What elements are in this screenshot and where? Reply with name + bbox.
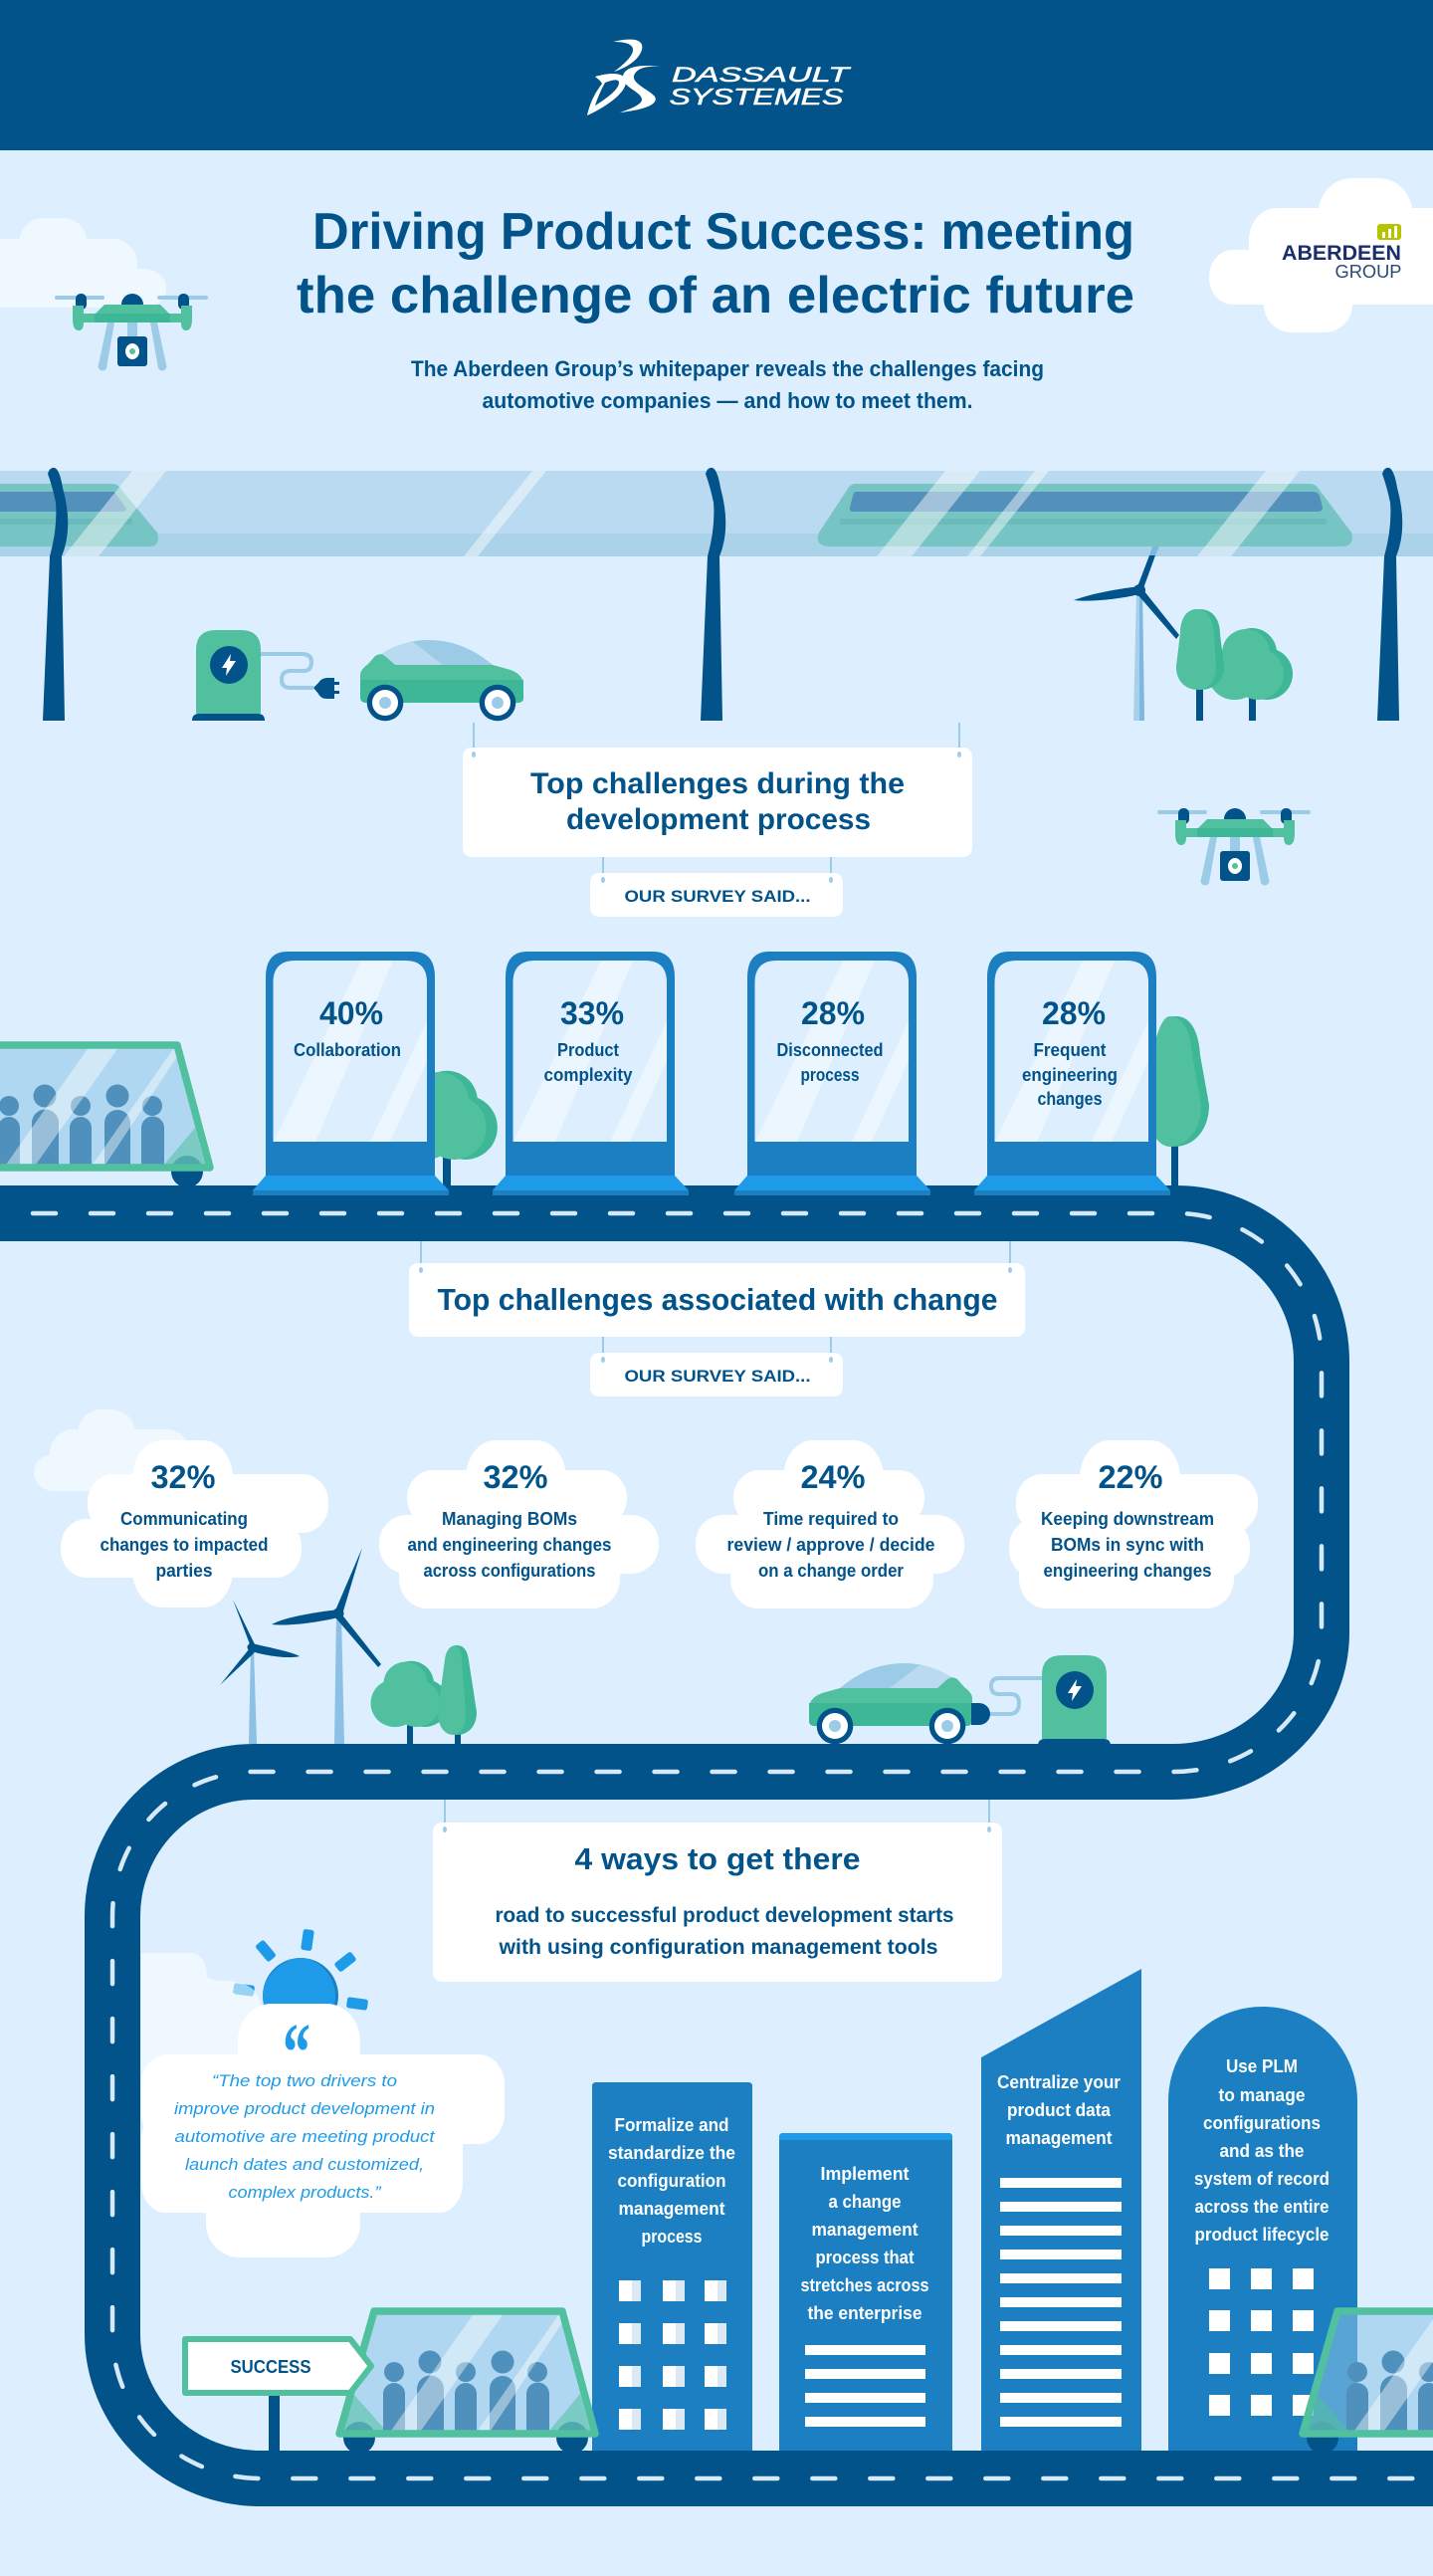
trees middle (371, 1645, 477, 1745)
cloud stat 3: time required: review / approve / decide (726, 1535, 935, 1555)
tree beside kiosk 4 (1144, 1016, 1209, 1186)
cloud stat 2: managing BOMs: across configurations (424, 1561, 595, 1581)
cloud stat 2: managing BOMs: Managing BOMs (442, 1509, 577, 1529)
kiosk 3: disconnected process: process (800, 1065, 860, 1085)
Aberdeen Group logo on cloud: ABERDEEN (1282, 242, 1401, 265)
tree beside kiosk 1 (392, 1071, 498, 1192)
panel: 4 ways to get there: 4 ways to get there (575, 1841, 860, 1876)
success signpost (185, 2339, 371, 2452)
wind turbines middle (220, 1548, 381, 1744)
building 1: standardize the (608, 2143, 735, 2163)
kiosk 1: collaboration (253, 952, 449, 1195)
kiosk 2: product complexity (493, 952, 689, 1195)
faint cloud behind stat 1 (34, 1409, 190, 1491)
building 2 (779, 2133, 952, 2451)
title: Driving Product Success: meeting (312, 203, 1134, 261)
building 1: management (619, 2199, 724, 2219)
cloud stat 1: communicating changes: changes to impacted (100, 1535, 269, 1555)
panel: top challenges during development (463, 723, 972, 857)
cloud stat 1: communicating changes: Communicating (120, 1509, 248, 1529)
panel: top challenges associated with change (409, 1241, 1025, 1337)
quote cloud: launch dates and customized, (185, 2155, 424, 2174)
trees top (1176, 609, 1293, 721)
cloud stat 1: communicating changes: parties (155, 1561, 213, 1581)
header band with Dassault Systemes logo (0, 0, 1433, 150)
bus centre (339, 2311, 595, 2454)
subtitle: The Aberdeen Group’s whitepaper reveals the challenges facing (411, 356, 1044, 381)
cloud stat 4: keeping downstream: engineering changes (1043, 1561, 1212, 1581)
building 4: and as the (1220, 2141, 1304, 2161)
kiosk 1: collaboration: Collaboration (294, 1040, 401, 1060)
quote cloud: “ (283, 2007, 310, 2099)
guideway glass reflections (64, 471, 1300, 556)
kiosk 3: disconnected process (734, 952, 930, 1195)
quote cloud (141, 2004, 505, 2257)
subtitle (411, 356, 1044, 413)
faint cloud top left (0, 218, 166, 308)
faint cloud over sun (141, 1953, 261, 2105)
building 2: Implement (820, 2164, 910, 2184)
kiosk 4: frequent engineering changes (974, 952, 1170, 1195)
Aberdeen Group logo on cloud: GROUP (1335, 262, 1401, 282)
road (0, 1213, 1433, 2478)
charger top (192, 630, 265, 721)
kiosk 4: frequent engineering changes: 28% (1042, 995, 1106, 1031)
success signpost: SUCCESS (231, 2357, 310, 2377)
panel: top challenges during development: Top challenges during the (530, 767, 905, 800)
kiosk 2: product complexity: Product (557, 1040, 619, 1060)
train right (818, 484, 1352, 546)
sun with rays (233, 1929, 368, 2034)
pylon 1 (43, 468, 68, 721)
panel: top challenges during development: development process (566, 803, 871, 836)
panel: 4 ways to get there (433, 1800, 1002, 1982)
drone left (57, 294, 206, 370)
panel: our survey said 2: OUR SURVEY SAID... (625, 1367, 810, 1386)
building 4: across the entire (1194, 2197, 1330, 2217)
panel: our survey said 1 (590, 857, 843, 917)
cloud stat 2: managing BOMs: and engineering changes (408, 1535, 611, 1555)
header band with Dassault Systemes logo: DASSAULT (672, 64, 853, 87)
kiosk 3: disconnected process: Disconnected (776, 1040, 884, 1060)
kiosk 2: product complexity: complexity (543, 1065, 633, 1085)
building 3 (981, 1969, 1141, 2451)
train left (0, 484, 158, 546)
kiosk 3: disconnected process: 28% (801, 995, 865, 1031)
drone right (1159, 808, 1309, 885)
cable top (261, 654, 313, 688)
cloud stat 4: keeping downstream: 22% (1099, 1459, 1162, 1495)
plug middle (971, 1703, 990, 1725)
bus right (1303, 2311, 1433, 2454)
kiosk 2: product complexity: 33% (560, 995, 624, 1031)
building 4: system of record (1194, 2169, 1330, 2189)
cloud stat 4: keeping downstream: BOMs in sync with (1051, 1535, 1204, 1555)
car top (360, 640, 523, 721)
building 3: product data (1007, 2100, 1112, 2120)
wind turbine top (1074, 546, 1179, 721)
building 2: the enterprise (808, 2303, 921, 2323)
building 1: Formalize and (615, 2115, 728, 2135)
building 1: configuration (617, 2171, 726, 2191)
cloud stat 2: managing BOMs (379, 1440, 659, 1609)
building 4: product lifecycle (1194, 2225, 1330, 2245)
cloud stat 3: time required (696, 1440, 964, 1609)
building 4: to manage (1218, 2085, 1306, 2105)
header band with Dassault Systemes logo: SYSTEMES (669, 84, 844, 109)
panel: 4 ways to get there: with using configuration management tools (498, 1936, 937, 1959)
cloud stat 1: communicating changes: 32% (151, 1459, 215, 1495)
cable middle (987, 1678, 1042, 1714)
building 2: stretches across (800, 2275, 929, 2295)
building 4 (1168, 2007, 1357, 2451)
cloud stat 3: time required: on a change order (758, 1561, 904, 1581)
quote cloud: improve product development in (174, 2099, 435, 2118)
charger middle (1038, 1655, 1111, 1746)
Aberdeen Group logo on cloud (1209, 178, 1433, 332)
panel: 4 ways to get there: road to successful product development starts (496, 1904, 953, 1927)
title: the challenge of an electric future (297, 267, 1134, 324)
cloud stat 2: managing BOMs: 32% (484, 1459, 547, 1495)
cloud stat 4: keeping downstream: Keeping downstream (1041, 1509, 1214, 1529)
building 1: process (641, 2227, 703, 2247)
cloud stat 1: communicating changes (61, 1440, 328, 1608)
panel: top challenges associated with change: Top challenges associated with change (438, 1282, 997, 1317)
cloud stat 3: time required: Time required to (763, 1509, 899, 1529)
building 4: Use PLM (1226, 2056, 1298, 2076)
kiosk 4: frequent engineering changes: changes (1037, 1089, 1103, 1109)
building 2: management (812, 2220, 918, 2240)
building 2: process that (816, 2248, 914, 2267)
quote cloud: “The top two drivers to (212, 2071, 397, 2090)
building 3: Centralize your (997, 2072, 1121, 2092)
pylon 2 (701, 468, 725, 721)
kiosk 4: frequent engineering changes: engineering (1022, 1065, 1118, 1085)
panel: our survey said 2 (590, 1337, 843, 1396)
quote cloud: complex products.” (229, 2183, 382, 2202)
quote cloud: automotive are meeting product (175, 2127, 436, 2146)
cloud stat 3: time required: 24% (800, 1459, 866, 1495)
pylon 3 (1377, 468, 1402, 721)
building 2: a change (828, 2192, 902, 2212)
subtitle: automotive companies — and how to meet them. (482, 388, 973, 413)
bus left (0, 1045, 210, 1187)
panel: our survey said 1: OUR SURVEY SAID... (625, 887, 810, 906)
elevated guideway (0, 471, 1433, 556)
building 3: management (1005, 2128, 1113, 2148)
building 4: configurations (1203, 2113, 1321, 2133)
kiosk 4: frequent engineering changes: Frequent (1033, 1040, 1107, 1060)
car middle (809, 1663, 972, 1744)
kiosk 1: collaboration: 40% (319, 995, 383, 1031)
cloud stat 4: keeping downstream (1009, 1440, 1258, 1609)
plug top (313, 678, 339, 699)
title (297, 203, 1134, 324)
building 1 (592, 2082, 752, 2451)
